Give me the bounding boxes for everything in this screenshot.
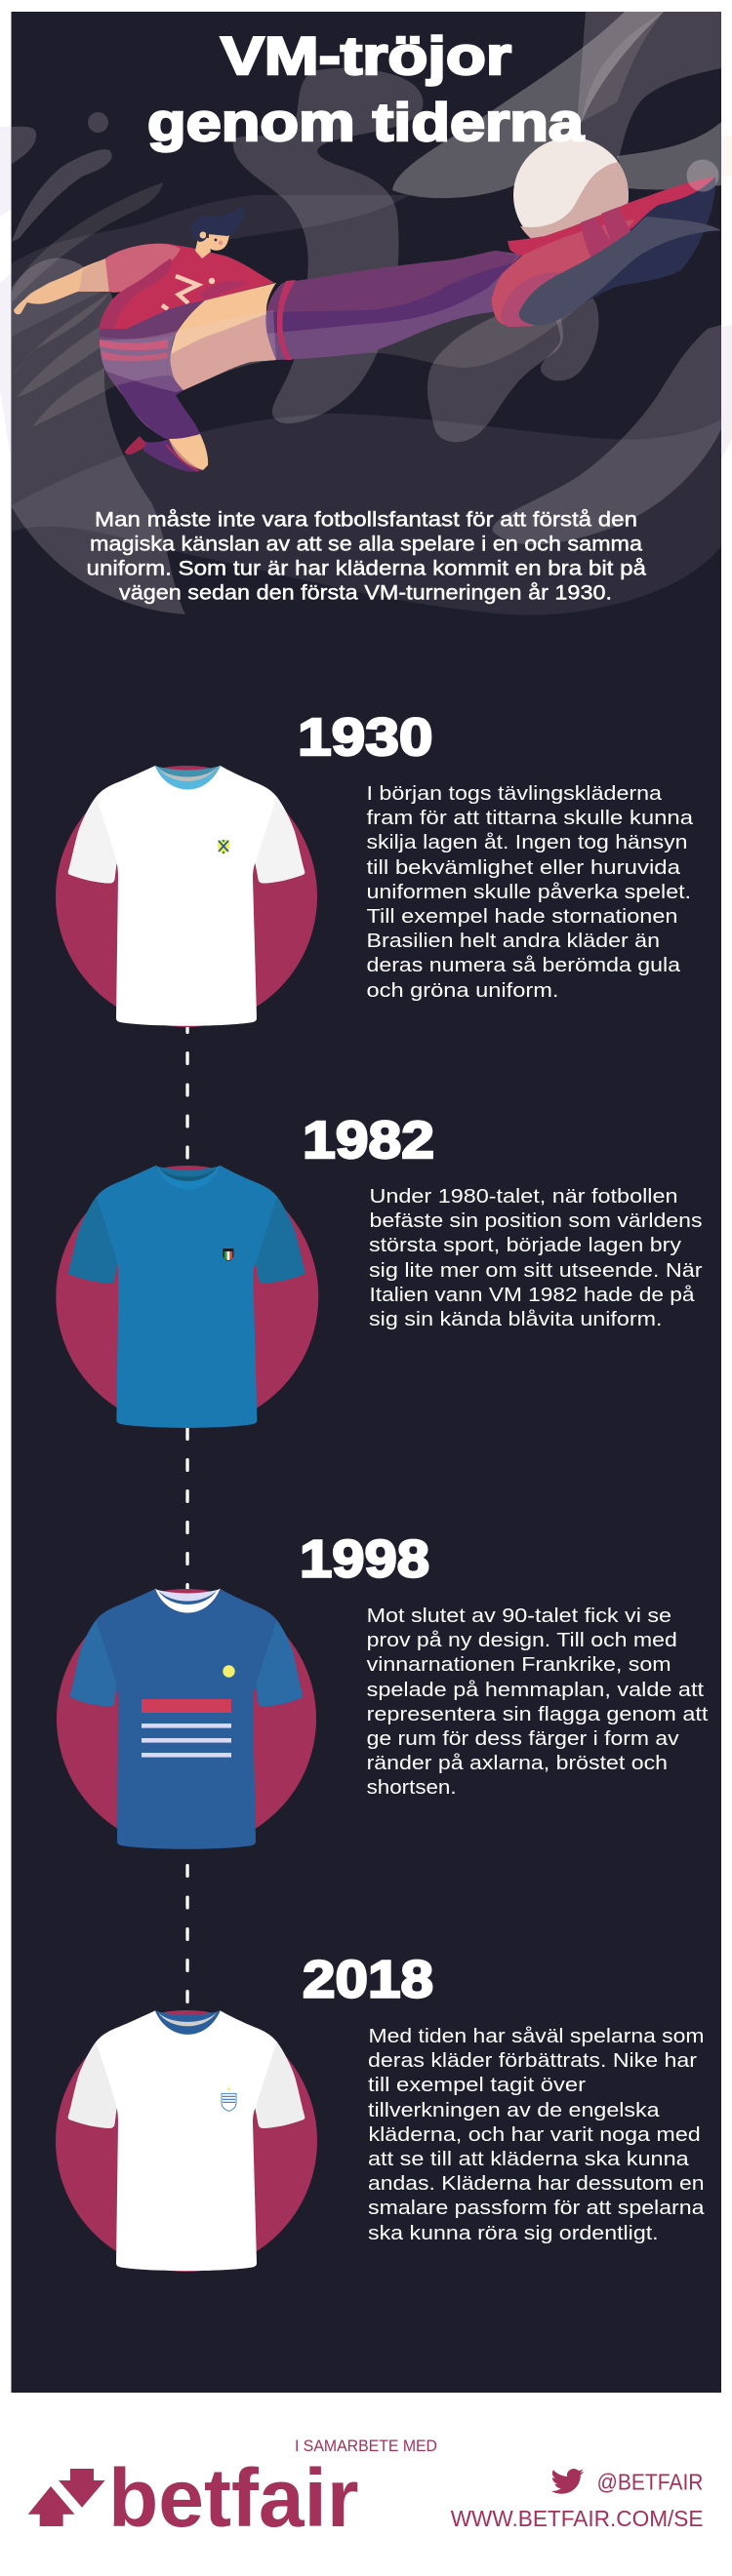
circle 1998 — [57, 1589, 316, 1848]
intro text: vägen sedan den första VM-turneringen år 1930. — [119, 581, 612, 605]
icon: badge 1982 — [223, 1248, 233, 1261]
text 1998: ränder på axlarna, bröstet och — [367, 1752, 668, 1774]
text 1982: Under 1980-talet, när fotbollen — [369, 1185, 677, 1208]
text 1930: I början togs tävlingskläderna — [367, 782, 663, 805]
text 1982: största sport, började lagen bry — [369, 1234, 682, 1256]
text 2018: deras kläder förbättrats. Nike har — [368, 2049, 697, 2072]
text 1982: sig lite mer om sitt utseende. När — [369, 1259, 703, 1282]
text 1982: sig sin kända blåvita uniform. — [369, 1308, 662, 1330]
partner label: I SAMARBETE MED — [295, 2437, 437, 2455]
intro text — [86, 509, 646, 605]
shirt number — [162, 276, 198, 309]
shirt 1998 — [70, 1588, 303, 1849]
player shirt — [100, 244, 274, 329]
hero illustration — [12, 12, 721, 615]
text 2018: smalare passform för att spelarna — [368, 2197, 705, 2219]
website: WWW.BETFAIR.COM/SE — [451, 2506, 703, 2531]
section: 1982 — [56, 1111, 703, 1428]
year heading 1998: 1998 — [300, 1529, 429, 1588]
player head — [190, 205, 244, 258]
text 1998: ge rum för dess färger i form av — [367, 1727, 679, 1750]
player thigh — [171, 283, 276, 390]
player boot — [492, 177, 721, 327]
icon: badge 1930 — [218, 840, 229, 854]
text 1998: representera sin flagga genom att — [367, 1703, 709, 1725]
timeline dashes — [185, 1020, 189, 2003]
text 1998: prov på ny design. Till och med — [367, 1629, 677, 1651]
text 1930: deras numera så berömda gula — [367, 954, 681, 976]
text 1998: shortsen. — [367, 1776, 457, 1799]
text 2018 — [368, 2025, 705, 2244]
text 2018: kläderna, och har varit noga med — [369, 2123, 701, 2146]
shirt stripes 1998 — [142, 1699, 231, 1758]
title: genom tiderna — [147, 92, 584, 152]
logo: betfair: betfair — [108, 2452, 359, 2544]
text 1998 — [367, 1605, 709, 1799]
shirt 2018 — [68, 2010, 305, 2271]
section: 1930 — [56, 708, 694, 1027]
intro text: uniform. Som tur är har kläderna kommit en bra bit på — [86, 558, 646, 579]
text 1930: uniformen skulle påverka spelet. — [367, 881, 691, 903]
player leg — [265, 251, 522, 360]
text 1930: Brasilien helt andra kläder än — [367, 930, 660, 952]
title — [147, 25, 584, 152]
text 1930 — [367, 782, 694, 1002]
player shorts and lower leg — [100, 300, 208, 472]
title: VM-tröjor — [221, 25, 511, 86]
text 1998: spelade på hemmaplan, valde att — [367, 1679, 704, 1701]
year heading 2018: 2018 — [303, 1951, 433, 2009]
overlay blobs — [100, 160, 718, 392]
circle 2018 — [56, 2010, 317, 2272]
circle 1982 — [56, 1166, 318, 1428]
icon: badge 2018 — [222, 2087, 236, 2111]
text 2018: tillverkningen av de engelska — [368, 2099, 660, 2121]
icon: badge 1998 — [223, 1665, 235, 1678]
text 1930: skilja lagen åt. Ingen tog hänsyn — [367, 831, 687, 853]
shirt 1930 — [68, 765, 305, 1026]
player arm — [14, 258, 109, 314]
illustration: football player — [14, 177, 721, 472]
intro text: Man måste inte vara fotbollsfantast för att förstå den — [95, 509, 637, 532]
background blobs — [12, 12, 721, 615]
icon: ball — [513, 138, 629, 253]
text 1930: fram för att tittarna skulle kunna — [367, 807, 694, 829]
text 1982: befäste sin position som världens — [369, 1209, 703, 1232]
section: 1998 — [57, 1529, 709, 1849]
text 2018: andas. Kläderna har dessutom en — [368, 2172, 705, 2195]
text 1930: Till exempel hade stornationen — [367, 905, 677, 928]
icon: twitter bird — [551, 2469, 584, 2494]
text 1930: och gröna uniform. — [367, 979, 558, 1002]
footer — [28, 2437, 703, 2544]
year heading 1930: 1930 — [298, 708, 433, 767]
intro text: magiska känslan av att se alla spelare i en och samma — [90, 533, 642, 556]
text 1998: vinnarnationen Frankrike, som — [367, 1653, 671, 1676]
twitter handle: @BETFAIR — [597, 2470, 703, 2495]
circle 1930 — [56, 766, 317, 1027]
year heading 1982: 1982 — [303, 1111, 434, 1169]
text 1982: Italien vann VM 1982 hade de på — [369, 1284, 695, 1306]
text 2018: Med tiden har såväl spelarna som — [369, 2025, 705, 2047]
text 2018: till exempel tagit över — [368, 2074, 586, 2096]
text 2018: ska kunna röra sig ordentligt. — [368, 2222, 659, 2244]
shirt 1982 — [68, 1165, 305, 1428]
text 1998: Mot slutet av 90-talet fick vi se — [367, 1605, 671, 1627]
section: 2018 — [56, 1951, 705, 2272]
text 2018: att se till att kläderna ska kunna — [368, 2148, 689, 2170]
text 1930: till bekvämlighet eller huruvida — [367, 856, 681, 879]
text 1982 — [369, 1185, 703, 1330]
